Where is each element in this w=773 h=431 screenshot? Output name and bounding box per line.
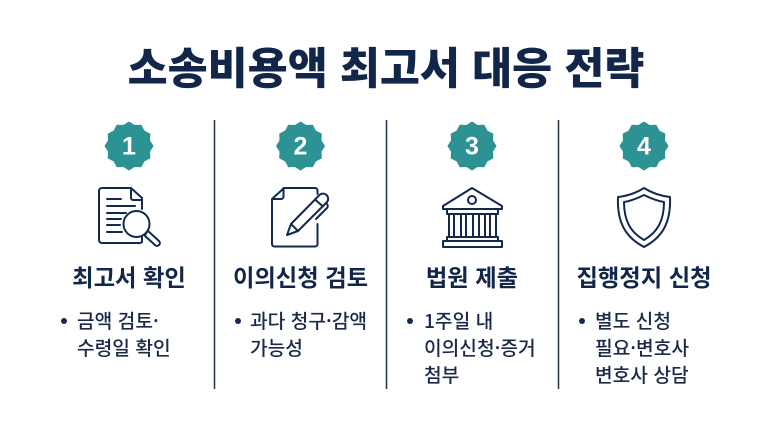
heading: step 1: 최고서 확인 bbox=[72, 259, 186, 293]
panel: step 3 bbox=[407, 122, 536, 388]
badge: step 1: 1 bbox=[122, 132, 136, 160]
bullet list: step 4 bbox=[579, 306, 689, 388]
panel: step 1 bbox=[61, 122, 186, 361]
bullet list: step 2 bbox=[235, 306, 367, 361]
title: 소송비용액 최고서 대응 전략 bbox=[128, 34, 644, 97]
bullet list: step 3: 이의신청·증거 bbox=[424, 333, 536, 361]
icon: shield bbox=[618, 188, 670, 247]
bullet list: step 3: 1주일 내 bbox=[424, 306, 493, 334]
badge: step 2: 2 bbox=[294, 132, 307, 160]
badge: step 1 bbox=[105, 122, 153, 170]
bullet list: step 1: 수령일 확인 bbox=[77, 333, 171, 361]
panel: step 2 bbox=[233, 122, 368, 361]
bullet list: step 2: 가능성 bbox=[250, 333, 303, 361]
bullet list: step 4: 변호사 상담 bbox=[595, 360, 689, 388]
bullet list: step 4: 필요·변호사 bbox=[595, 333, 689, 361]
icon: document with magnifier bbox=[99, 188, 160, 246]
badge: step 4: 4 bbox=[637, 132, 651, 160]
bullet list: step 4: 별도 신청 bbox=[595, 306, 671, 334]
badge: step 3: 3 bbox=[465, 132, 479, 160]
bullet list: step 1 bbox=[61, 306, 171, 361]
bullet list: step 3 bbox=[407, 306, 536, 388]
heading: step 4: 집행정지 신청 bbox=[576, 259, 712, 293]
icon: document with pen bbox=[272, 188, 328, 246]
panel: step 4 bbox=[576, 122, 712, 388]
heading: step 3: 법원 제출 bbox=[426, 259, 518, 293]
badge: step 4 bbox=[620, 122, 668, 170]
bullet list: step 1: 금액 검토· bbox=[77, 306, 159, 334]
badge: step 2 bbox=[276, 122, 324, 170]
badge: step 3 bbox=[448, 122, 496, 170]
heading: step 2: 이의신청 검토 bbox=[233, 259, 368, 293]
bullet list: step 2: 과다 청구·감액 bbox=[250, 306, 367, 334]
bullet list: step 3: 첨부 bbox=[424, 360, 459, 388]
icon: courthouse bbox=[443, 188, 502, 247]
